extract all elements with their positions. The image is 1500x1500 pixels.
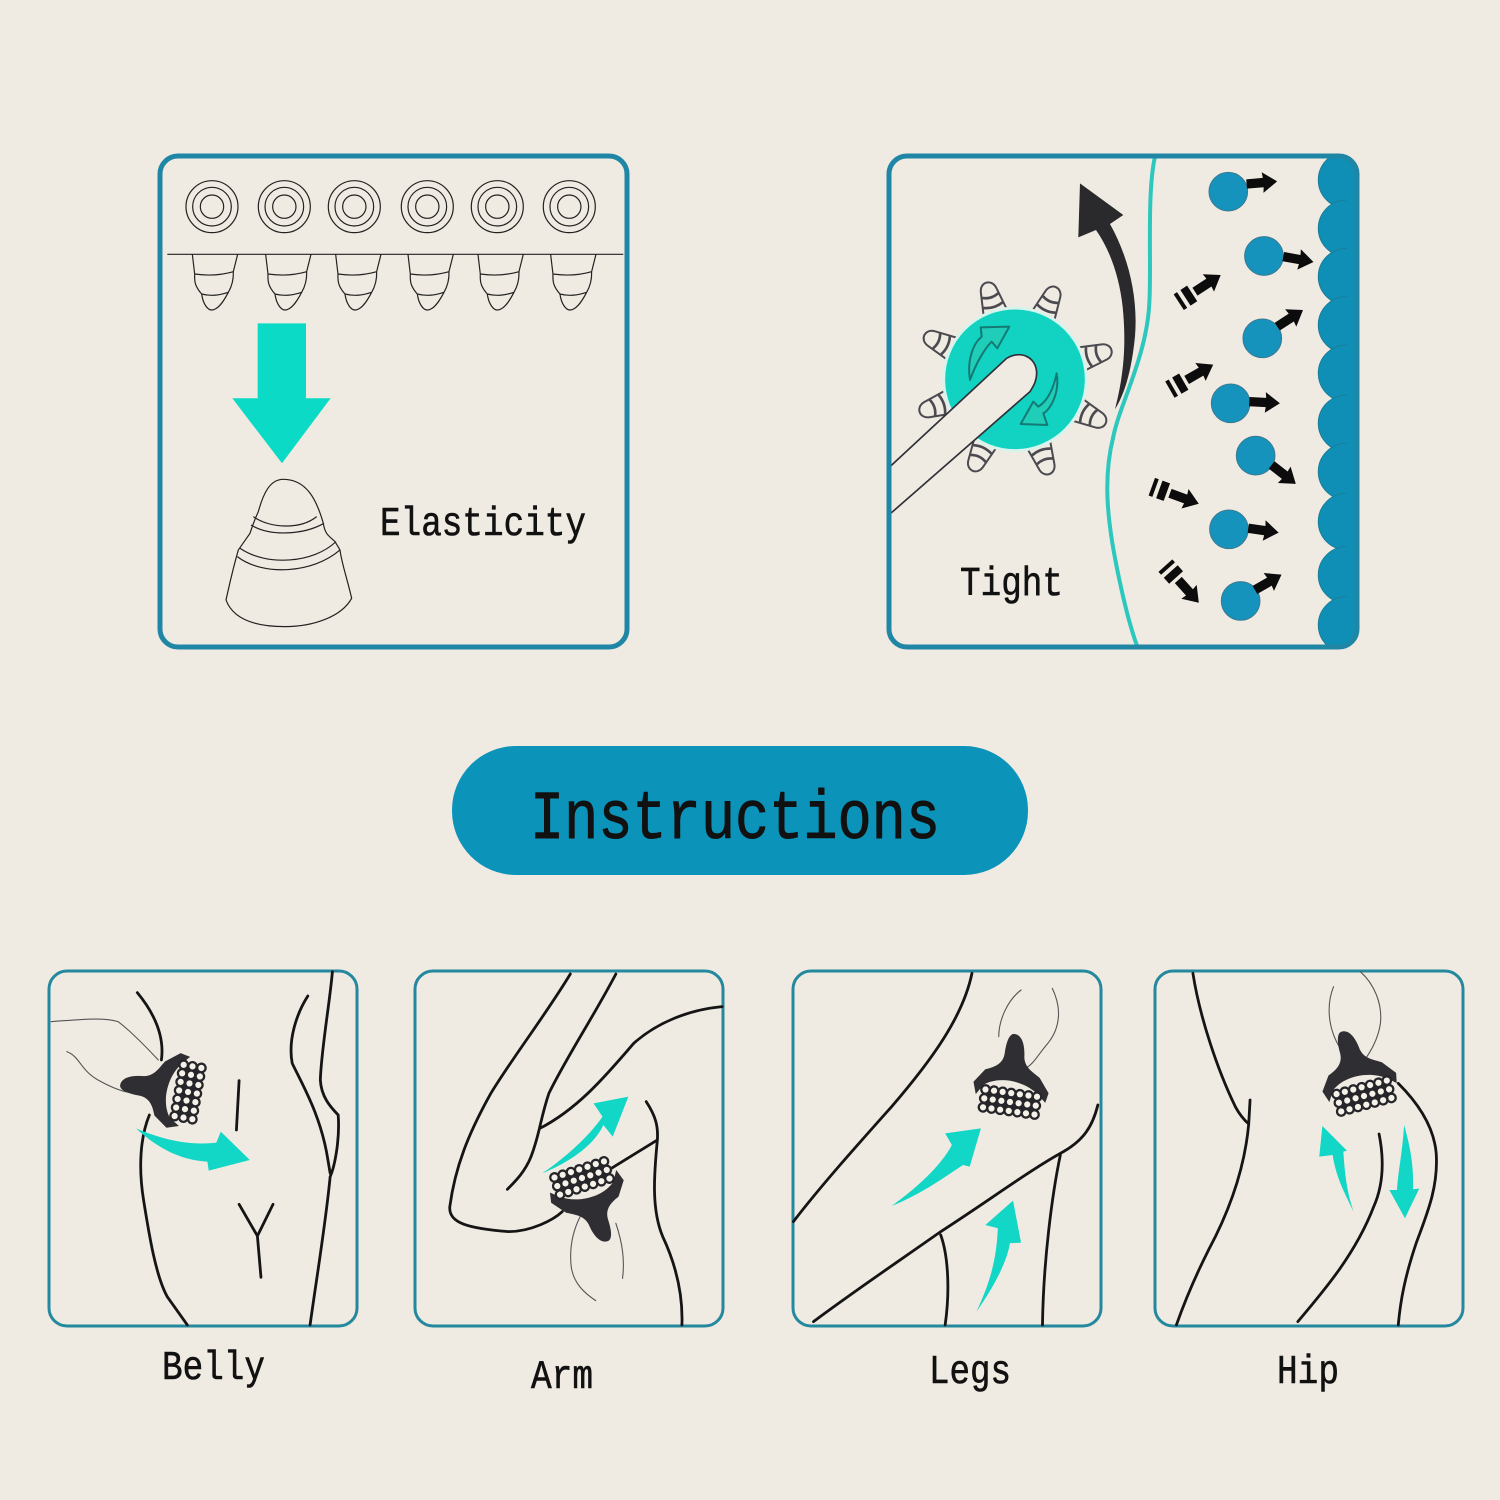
enlarged nub	[226, 479, 352, 627]
hand sketch	[1329, 972, 1381, 1060]
skin line	[1107, 157, 1155, 647]
label: Hip: Hip	[1277, 1350, 1339, 1396]
hip outline	[1176, 973, 1436, 1325]
panel: hip	[1155, 971, 1463, 1396]
infographic canvas	[48, 154, 1464, 1392]
panel: tight	[889, 152, 1375, 653]
belly drawing	[51, 972, 339, 1325]
panel: belly	[49, 971, 357, 1392]
hip drawing	[1176, 972, 1436, 1325]
massage nodes diagram	[167, 181, 623, 627]
arm frame	[415, 971, 723, 1326]
legs frame	[793, 971, 1101, 1326]
down arrow	[232, 323, 331, 463]
handle	[890, 355, 1037, 514]
panel frame: elasticity	[160, 156, 627, 647]
scalloped tissue wall	[1318, 156, 1354, 644]
baseline and side-view nubs	[167, 254, 623, 310]
label: Belly: Belly	[162, 1346, 265, 1392]
teal arrows	[1319, 1125, 1419, 1218]
legs drawing	[793, 973, 1098, 1325]
panel: arm	[415, 971, 723, 1401]
leg outline	[793, 973, 1098, 1325]
label: Tight: Tight	[960, 562, 1063, 608]
panel: legs	[793, 971, 1101, 1396]
concentric circles row	[186, 181, 595, 233]
roller icon	[1309, 1021, 1403, 1120]
panel: elasticity	[160, 156, 627, 647]
big curved arrow	[1078, 183, 1136, 409]
skin cross-section drawing	[890, 152, 1375, 653]
rotation arrows	[969, 327, 1057, 425]
dashed motion arrows	[1148, 266, 1226, 610]
roller icon	[969, 1029, 1056, 1121]
roller icon	[542, 1152, 640, 1254]
hand sketch	[51, 1019, 158, 1093]
roller hub	[944, 308, 1086, 451]
heading text: Instructions	[530, 782, 940, 859]
body outline	[137, 972, 339, 1325]
arm drawing	[450, 974, 722, 1325]
roller icon	[114, 1044, 209, 1133]
belly frame	[49, 971, 357, 1326]
label: Legs: Legs	[929, 1350, 1011, 1396]
particles	[1209, 172, 1283, 620]
hip frame	[1155, 971, 1463, 1326]
label: Elasticity: Elasticity	[380, 502, 586, 548]
heading pill: Instructions	[452, 746, 1028, 875]
teal arrow	[136, 1128, 250, 1171]
particle arrows	[1246, 171, 1315, 599]
teal arrow	[542, 1097, 628, 1173]
label: Arm: Arm	[531, 1355, 593, 1401]
arm outline	[450, 974, 722, 1325]
panel frame: tight	[889, 156, 1357, 647]
hand sketch	[999, 988, 1059, 1068]
hand sketch	[571, 1217, 623, 1301]
roller spikes	[916, 279, 1115, 478]
pill background	[452, 746, 1028, 875]
teal arrows	[892, 1128, 1021, 1312]
